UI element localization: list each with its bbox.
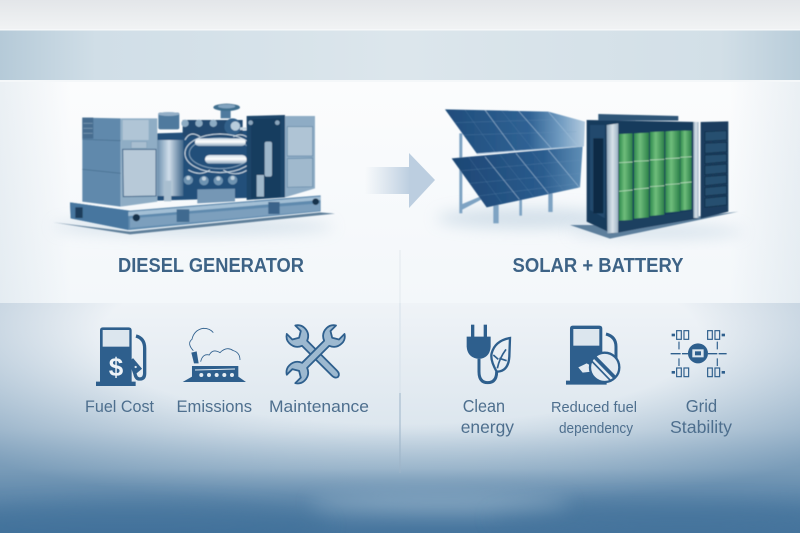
heading: solar + battery: SOLAR + BATTERY (512, 255, 684, 277)
label: fuel cost: Fuel Cost (85, 397, 154, 416)
label: reduced fuel dependency (551, 400, 637, 437)
label: reduced fuel dependency: Reduced fuel (551, 400, 637, 416)
label: grid stability: Stability (670, 417, 732, 437)
heading: diesel generator: DIESEL GENERATOR (118, 255, 305, 277)
label: emissions: Emissions (176, 397, 252, 416)
label: clean energy: energy (461, 417, 514, 437)
label: clean energy: Clean (463, 396, 505, 416)
solar panels and battery illustration (437, 109, 743, 239)
icon: maintenance wrenches (283, 322, 348, 387)
icon: clean energy plug and leaf (467, 325, 510, 383)
label: maintenance: Maintenance (269, 397, 369, 416)
icon: grid stability (671, 331, 727, 377)
label: grid stability: Grid (686, 396, 717, 416)
transition arrow (365, 153, 435, 208)
icon: fuel cost pump (96, 327, 145, 386)
icon: emissions factory (183, 328, 246, 382)
label: grid stability (670, 396, 732, 437)
icon: fuel cost pump: $ (109, 352, 124, 382)
diesel generator illustration (53, 104, 335, 235)
label: reduced fuel dependency: dependency (559, 421, 634, 437)
icon: reduced fuel dependency (566, 326, 619, 385)
label: clean energy (461, 396, 514, 437)
